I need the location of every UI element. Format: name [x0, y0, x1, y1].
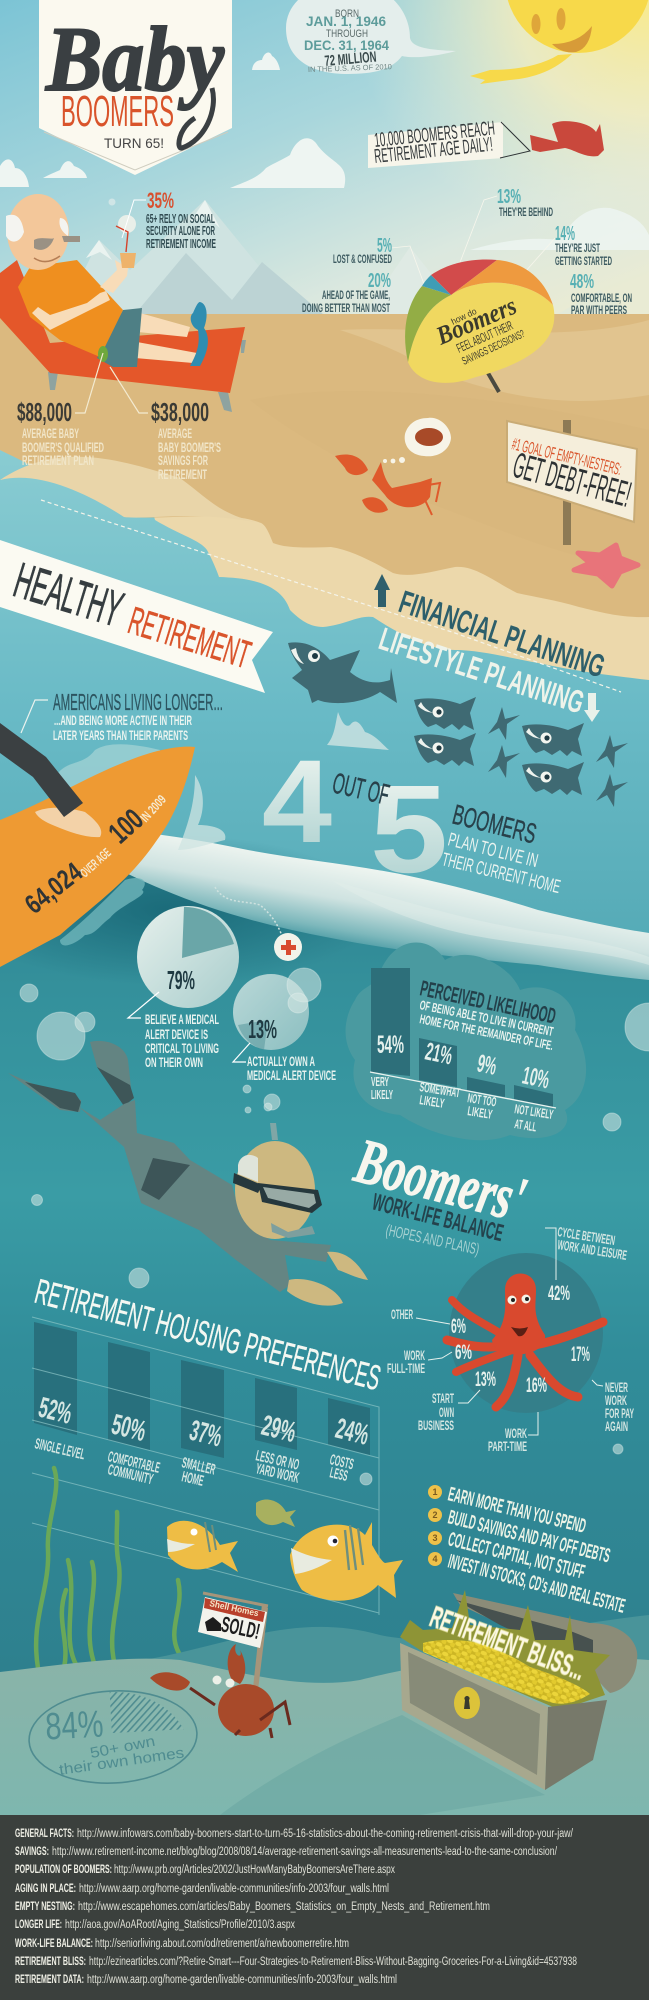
- pie chart: 79%: ON THEIR OWN: [145, 1054, 203, 1070]
- background: wet sand: [0, 440, 649, 680]
- footer: sources: AGING IN PLACE:: [15, 1883, 76, 1895]
- bar labels: NOT LIKELY: [514, 1101, 555, 1122]
- percentages: [451, 1282, 590, 1397]
- head: [7, 194, 69, 270]
- regulator: [271, 1223, 315, 1238]
- chart title: [418, 975, 558, 1053]
- oval: 84% own homes: [27, 1687, 199, 1787]
- surfer foot: [35, 808, 101, 837]
- callout labels: START: [432, 1391, 454, 1406]
- background: deep sea: [0, 830, 649, 1700]
- sign post: [563, 420, 571, 545]
- umbrella title: how do: [449, 306, 478, 327]
- bar values: 10%: [520, 1061, 552, 1094]
- speech bubble: birth years: DEC. 31, 1964: [304, 37, 389, 53]
- speech bubble: birth years: THROUGH: [326, 28, 368, 40]
- callout labels: BUSINESS: [418, 1418, 454, 1433]
- label: 14% started: 14%: [555, 223, 575, 245]
- red 14%: [431, 260, 497, 295]
- umbrella pie chart: [391, 196, 555, 392]
- surfer leg: [0, 723, 83, 817]
- callout lines: [416, 1228, 603, 1435]
- eyes: [508, 1294, 530, 1336]
- shirt: [18, 260, 123, 357]
- percentages: 16%: [526, 1374, 547, 1397]
- footer: sources: http://www.prb.org/Articles/2002/JustHowManyBabyBoomersAreThere.aspx: [114, 1864, 395, 1876]
- title banner: [39, 0, 232, 175]
- label: 5% lost: LOST & CONFUSED: [333, 252, 392, 266]
- housing labels: YARD WORK: [254, 1460, 301, 1487]
- chest front: [400, 1643, 548, 1790]
- fish: small: [256, 1500, 296, 1527]
- octopus head: [492, 1274, 545, 1355]
- americans living longer: [21, 689, 223, 743]
- stat: 35% social security: 35%: [147, 188, 174, 213]
- housing labels: HOME: [180, 1468, 205, 1490]
- board stat: OVER AGE: [77, 845, 114, 880]
- footer: sources: [0, 1815, 649, 2000]
- background: dry sand: [0, 314, 649, 617]
- splash behind board: [50, 744, 175, 810]
- front hand: [327, 1252, 368, 1280]
- housing labels: COMMUNITY: [106, 1461, 155, 1488]
- green 20%: [405, 286, 451, 362]
- black belt: [141, 1158, 190, 1200]
- financial planning: [374, 574, 609, 684]
- dive mask: [258, 1183, 322, 1213]
- stat: $88,000: RETIREMENT PLAN: [22, 452, 94, 468]
- footer: sources: RETIREMENT DATA:: [15, 1974, 84, 1986]
- healthy retirement ribbon: RETIREMENT: [123, 599, 255, 677]
- boomers heading: Boomers': [348, 1125, 533, 1235]
- icon: large shark: [288, 642, 397, 703]
- footer: sources: LONGER LIFE:: [15, 1919, 62, 1931]
- stat: $38,000: RETIREMENT: [158, 466, 207, 482]
- front fin: [8, 1073, 81, 1112]
- percentages: 6%: [455, 1341, 472, 1364]
- background: sun glow: [250, 0, 649, 340]
- boomers heading: WORK-LIFE BALANCE: [370, 1189, 506, 1247]
- chest side: [545, 1700, 607, 1790]
- stat: $38,000: $38,000: [151, 397, 209, 427]
- pie chart: 13%: ACTUALLY OWN A: [247, 1053, 315, 1069]
- sold sign: SOLD!: [219, 1611, 262, 1644]
- numbered tips: 1: [432, 1487, 438, 1497]
- label: 20% ahead: AHEAD OF THE GAME,: [322, 288, 390, 302]
- stat: $38,000: SAVINGS FOR: [158, 452, 208, 468]
- bar labels: VERY: [371, 1074, 389, 1089]
- speech bubble: birth years: JAN. 1, 1946: [306, 13, 386, 29]
- oval: 84% own homes: 50+ own: [89, 1733, 157, 1762]
- orange 48%: [451, 260, 553, 305]
- number 4: 4: [262, 736, 332, 868]
- housing labels: SMALLER: [180, 1454, 217, 1479]
- chart title: HOME FOR THE REMAINDER OF LIFE.: [418, 1011, 555, 1053]
- boomers plan text: [440, 799, 562, 898]
- yellow underside: [408, 283, 554, 383]
- stat: 35% social security: SECURITY ALONE FOR: [146, 224, 215, 238]
- stat: $38,000: [110, 367, 221, 482]
- footer: sources: SAVINGS:: [15, 1846, 49, 1858]
- footer: sources: GENERAL FACTS:: [15, 1828, 74, 1840]
- housing labels: COMFORTABLE: [106, 1448, 162, 1477]
- pole: [488, 373, 499, 392]
- blue 5%: [422, 275, 451, 295]
- stat: $88,000: [17, 353, 104, 468]
- callout labels: WORK: [505, 1426, 527, 1441]
- pie chart: 79%: CRITICAL TO LIVING: [145, 1040, 219, 1056]
- umbrella title: SAVINGS DECISIONS?: [460, 328, 527, 368]
- man on lounger: [0, 194, 246, 412]
- footer: sources: WORK-LIFE BALANCE:: [15, 1938, 93, 1950]
- pie chart: 79%: 79%: [167, 965, 195, 995]
- callout labels: AGAIN: [605, 1419, 628, 1434]
- arm raised: [100, 260, 128, 293]
- stat: $88,000: AVERAGE BABY: [22, 425, 79, 441]
- foam wave: [120, 830, 649, 980]
- sun: [470, 0, 649, 84]
- fish: medium: [167, 1521, 238, 1572]
- backdrop circle: [449, 1253, 603, 1413]
- housing values: 50%: [108, 1409, 149, 1448]
- healthy retirement ribbon: [0, 540, 273, 693]
- stat: 35% social security: [122, 188, 216, 251]
- plane banner: 10,000 BOOMERS REACH: [373, 117, 496, 152]
- boomers heading: [348, 1125, 533, 1259]
- boomers heading: (HOPES AND PLANS): [384, 1222, 481, 1259]
- board stat: 100: [103, 803, 150, 850]
- bar labels: LIKELY: [371, 1087, 393, 1102]
- bar values: 9%: [475, 1049, 499, 1081]
- front foot: [25, 1082, 81, 1112]
- speech bubble: birth years: BORN: [335, 8, 359, 20]
- shell: [415, 428, 443, 446]
- background: sea upper: [0, 445, 649, 980]
- label: 13% behind: 13%: [497, 186, 521, 208]
- keyhole: [454, 1687, 480, 1719]
- boomers plan text: PLAN TO LIVE IN: [446, 829, 540, 872]
- suit: [79, 1100, 331, 1292]
- footer: sources: http://www.aarp.org/home-garden/livable-communities/info-2003/four_walls.html: [87, 1974, 397, 1986]
- percentages: 42%: [548, 1282, 570, 1305]
- text: AMERICANS LIVING LONGER...: [53, 689, 223, 715]
- back foot: [97, 1067, 134, 1106]
- seaweed: [36, 1468, 180, 1668]
- healthy retirement ribbon: HEALTHY: [8, 552, 129, 638]
- callout labels: OWN: [439, 1405, 454, 1420]
- footer: sources: POPULATION OF BOOMERS:: [15, 1864, 112, 1876]
- label: 20% ahead: DOING BETTER THAN MOST: [302, 301, 390, 315]
- green pocket: [98, 346, 108, 362]
- octopus chart: 17%: [571, 1343, 590, 1366]
- bubbles: [20, 968, 649, 1485]
- bar labels: LIKELY: [467, 1103, 494, 1122]
- stat: $88,000: $88,000: [17, 397, 72, 427]
- speech bubble: birth years: IN THE U.S. AS OF 2010: [308, 62, 392, 74]
- lounger legs: [48, 340, 246, 412]
- label: 48% comfortable: 48%: [570, 271, 594, 293]
- label: 20% ahead: 20%: [368, 270, 391, 292]
- red lounger: [0, 260, 245, 393]
- numbered tips: 4: [432, 1554, 438, 1564]
- numbered tips: 3: [432, 1533, 438, 1543]
- bars: [371, 968, 553, 1108]
- footer: sources: http://aoa.gov/AoARoot/Aging_Statistics/Profile/2010/3.aspx: [65, 1919, 295, 1931]
- sea floor back hill: [130, 1615, 649, 1700]
- out of: OUT OF: [329, 768, 392, 812]
- board stat: [19, 792, 169, 920]
- sunglasses: [34, 236, 80, 250]
- smile: [34, 256, 60, 262]
- sand dunes: [0, 320, 649, 570]
- oval: 84% own homes: their own homes: [58, 1744, 185, 1779]
- footer: sources: RETIREMENT BLISS:: [15, 1956, 86, 1968]
- footer: sources: http://seniorliving.about.com/od/retirement/a/newboomerretire.htm: [95, 1938, 349, 1950]
- bar chart: housing: [32, 1317, 379, 1615]
- icon: red plane: [530, 121, 604, 156]
- red lobster with thought bubble: [335, 418, 451, 515]
- housing values: 24%: [332, 1413, 372, 1452]
- icon: starfish: [574, 545, 638, 586]
- pie chart: 13%: [233, 974, 336, 1083]
- numbered tips: 2: [432, 1510, 438, 1520]
- bar labels: SOMEWHAT: [419, 1079, 461, 1100]
- pie chart: 79%: [128, 906, 239, 1070]
- shark eye: [291, 648, 320, 664]
- pie chart: 79%: BELIEVE A MEDICAL: [145, 1011, 219, 1027]
- callout lines: [391, 196, 555, 284]
- label: 13% behind: THEY'RE BEHIND: [499, 205, 553, 219]
- title banner: BOOMERS: [61, 87, 174, 136]
- housing labels: SINGLE LEVEL: [33, 1435, 87, 1463]
- umbrella title: FEEL ABOUT THEIR: [454, 318, 515, 356]
- head: [235, 1141, 315, 1239]
- white hair: [6, 215, 69, 242]
- hair: [238, 1155, 258, 1182]
- callout labels: OTHER: [391, 1307, 413, 1322]
- splash right of board: [178, 775, 225, 850]
- stat: $88,000: BOOMER'S QUALIFIED: [22, 439, 104, 455]
- percentages: 13%: [475, 1368, 496, 1391]
- treasure chest: [400, 1590, 637, 1790]
- pie chart: 79%: ALERT DEVICE IS: [145, 1026, 208, 1042]
- clouds: [0, 53, 649, 250]
- footer: sources: http://www.aarp.org/home-garden/livable-communities/info-2003/four_walls.html: [79, 1883, 389, 1895]
- cloud backdrop: [346, 943, 586, 1140]
- housing values: 37%: [186, 1415, 225, 1454]
- numbered tips: [428, 1483, 627, 1618]
- lid inner dark: [456, 1600, 593, 1660]
- flip flops: [190, 302, 208, 366]
- number 5: 5: [370, 760, 448, 899]
- speech bubble: birth years: 72 MILLION: [324, 49, 377, 70]
- label: 14% started: THEY'RE JUST: [555, 241, 600, 255]
- title banner: TURN 65!: [104, 135, 164, 151]
- callout labels: WORK: [605, 1393, 627, 1408]
- background: sand: [0, 314, 649, 574]
- brown crab: [150, 1644, 290, 1738]
- shoreline dashed line: [41, 500, 621, 692]
- label: 48% comfortable: [570, 271, 632, 317]
- speech bubble: birth years: [286, 0, 456, 74]
- back hand: [287, 1279, 343, 1306]
- oval: 84% own homes: 84%: [44, 1704, 104, 1748]
- housing labels: COSTS: [328, 1451, 355, 1473]
- lifestyle planning: [375, 620, 600, 722]
- background: sky: [0, 0, 649, 340]
- glow rays: [400, 1590, 610, 1710]
- chart title: OF BEING ABLE TO LIVE IN CURRENT: [418, 997, 555, 1039]
- housing values: 52%: [35, 1392, 75, 1431]
- housing labels: [33, 1435, 355, 1490]
- bar labels: NOT TOO: [467, 1090, 498, 1109]
- housing labels: LESS OR NO: [254, 1447, 301, 1474]
- label: 5% lost: [333, 235, 392, 266]
- callout labels: [387, 1224, 634, 1454]
- octopus chart: [387, 1224, 634, 1454]
- label: 20% ahead: [302, 270, 391, 315]
- label: 14% started: [555, 223, 612, 268]
- lid: [453, 1593, 637, 1693]
- fish: big: [290, 1522, 403, 1601]
- housing values: [35, 1392, 372, 1454]
- housing labels: LESS: [328, 1464, 349, 1485]
- title banner: Baby: [45, 8, 225, 110]
- board stat: 64,024: [19, 857, 88, 920]
- octopus arms: [447, 1300, 603, 1407]
- pie chart: 13%: 13%: [248, 1014, 277, 1044]
- stat: 35% social security: 65+ RELY ON SOCIAL: [146, 212, 215, 226]
- inner foam: [331, 880, 649, 965]
- bar values: 54%: [377, 1031, 404, 1059]
- arm across chest: [32, 291, 110, 330]
- label: 13% behind: [497, 186, 553, 219]
- plane banner: RETIREMENT AGE DAILY!: [373, 134, 494, 168]
- surfboard: [0, 723, 195, 967]
- plane banner: [368, 117, 530, 168]
- umbrella title: Boomers: [431, 291, 521, 351]
- drink: [120, 253, 136, 268]
- callout labels: PART-TIME: [488, 1439, 527, 1454]
- callout labels: WORK: [404, 1348, 425, 1363]
- percentages: 6%: [451, 1315, 466, 1338]
- shorts: [97, 308, 142, 367]
- diver: [8, 1041, 368, 1306]
- mountains: [60, 200, 649, 330]
- mask strap: [233, 1173, 262, 1193]
- stat: $38,000: AVERAGE: [158, 425, 192, 441]
- snorkel bubble: [270, 1123, 278, 1140]
- boomers plan text: BOOMERS: [450, 799, 540, 849]
- bar values: [377, 1031, 552, 1094]
- sign: debt free: [507, 421, 637, 522]
- bar labels: [371, 1074, 555, 1134]
- bar labels: AT ALL: [514, 1116, 538, 1134]
- americans living longer: LATER YEARS THAN THEIR PARENTS: [53, 727, 188, 743]
- americans living longer: ...AND BEING MORE ACTIVE IN THEIR: [54, 712, 192, 728]
- dark water shade: [0, 835, 380, 985]
- medical alert pendant: [215, 887, 302, 961]
- stat: $38,000: BABY BOOMER'S: [158, 439, 221, 455]
- footer: sources: http://www.escapehomes.com/articles/Baby_Boomers_Statistics_on_Empty_Nests_and_Retirement.htm: [78, 1901, 490, 1913]
- board stat: IN 2009: [137, 792, 169, 825]
- bar labels: LIKELY: [419, 1092, 446, 1111]
- sold sign: Shell Homes: [209, 1598, 260, 1618]
- legs: [135, 313, 197, 363]
- stat: 35% social security: RETIREMENT INCOME: [146, 237, 216, 251]
- thought bubble: [405, 418, 451, 456]
- footer: sources: EMPTY NESTING:: [15, 1901, 75, 1913]
- label: 5% lost: 5%: [377, 235, 392, 257]
- callout labels: FULL-TIME: [387, 1361, 425, 1376]
- shark school: [414, 697, 628, 807]
- housing values: 29%: [258, 1410, 299, 1449]
- sea floor: [0, 1657, 649, 1815]
- bar chart: perceived likelihood: [346, 943, 586, 1140]
- gold coins: [423, 1640, 590, 1704]
- splash: [327, 712, 389, 750]
- chest shadow: [220, 1715, 545, 1815]
- foam under board: [60, 878, 145, 945]
- sold sign: [198, 1593, 268, 1690]
- back fin: [90, 1041, 132, 1100]
- bar values: 21%: [423, 1037, 455, 1070]
- pie chart: 13%: MEDICAL ALERT DEVICE: [247, 1067, 336, 1083]
